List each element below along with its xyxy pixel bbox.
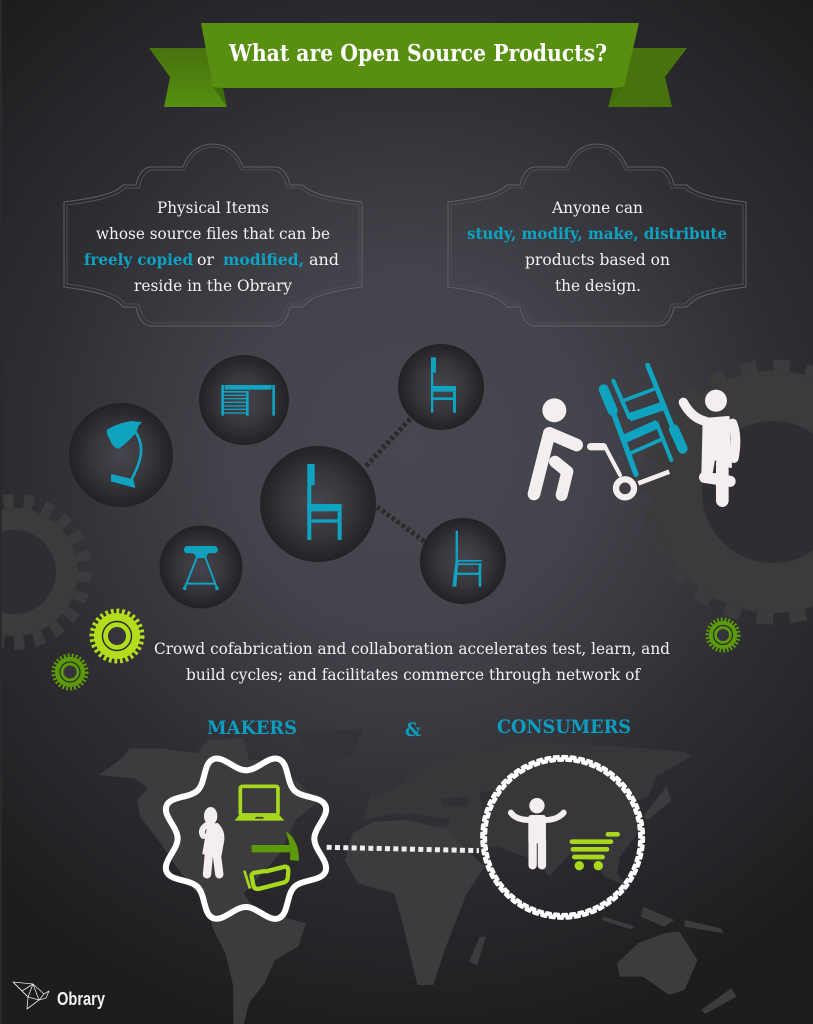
thinking person <box>202 807 223 874</box>
text: crowd cofabrication: build cycles; and facilitates commerce through network of <box>186 666 641 684</box>
text: anyone can <box>467 199 727 295</box>
text: anyone can: Anyone can <box>551 199 643 217</box>
text: physical items: freely copied <box>84 250 193 269</box>
consumer person <box>511 798 564 865</box>
dotted connector <box>327 847 479 851</box>
icon: origami bird <box>13 982 49 1009</box>
ribbon right tail <box>608 48 687 107</box>
consumers scalloped badge <box>482 756 644 918</box>
gear: green right <box>708 620 738 650</box>
node: bottom chair <box>420 518 506 604</box>
clamp <box>244 867 288 889</box>
person pushing <box>534 398 577 495</box>
shopping cart <box>572 834 618 870</box>
makers and consumers diagram <box>155 748 644 929</box>
node: central chair <box>260 446 376 562</box>
panel: physical items <box>64 144 362 326</box>
text: physical items: or <box>197 251 215 269</box>
text: crowd cofabrication <box>154 640 670 684</box>
laptop <box>235 786 284 821</box>
text: physical items: whose source files that can be <box>96 225 330 243</box>
node: lamp <box>69 403 173 507</box>
gear: green left <box>54 656 86 688</box>
title: What are Open Source Products? <box>228 40 607 67</box>
text: anyone can: products based on <box>525 251 670 269</box>
text: physical items: modified, <box>223 250 304 269</box>
dotted connector: bottom <box>377 507 442 554</box>
text: physical items: reside in the Obrary <box>134 277 292 295</box>
text: anyone can: the design. <box>555 277 641 295</box>
text: physical items <box>84 199 339 295</box>
tilted chairs <box>604 365 683 474</box>
world map <box>99 728 736 1024</box>
wordmark: Obrary <box>57 989 105 1009</box>
gear: large right <box>647 366 813 618</box>
heading: ampersand: & <box>405 720 421 741</box>
gear: lime large <box>92 611 142 661</box>
ornate frame <box>64 144 362 326</box>
heading: makers: MAKERS <box>207 718 297 739</box>
text: crowd cofabrication: Crowd cofabrication and collaboration accelerates test, learn, and <box>154 640 670 658</box>
dotted connector: top <box>366 418 411 466</box>
node: stool <box>160 526 242 608</box>
sea patches <box>405 792 493 827</box>
gear: large left <box>0 501 85 643</box>
node: top chair <box>398 344 484 430</box>
text: physical items: Physical Items <box>157 199 269 217</box>
hammer <box>252 832 299 861</box>
text: anyone can: study, modify, make, distribute <box>467 224 727 243</box>
title ribbon <box>149 23 687 107</box>
product network <box>69 344 506 608</box>
makers wavy badge <box>155 748 337 929</box>
heading: consumers: CONSUMERS <box>497 717 631 738</box>
ornate frame <box>448 144 746 326</box>
text: physical items: and <box>309 251 339 269</box>
person receiving <box>683 390 736 501</box>
logo: Obrary <box>13 982 105 1009</box>
ribbon centre <box>201 23 639 88</box>
panel: anyone can <box>448 144 746 326</box>
ribbon left tail <box>149 48 227 107</box>
hand truck <box>591 447 669 497</box>
illustration: moving a chair on a hand truck <box>534 365 736 501</box>
node: desk <box>199 355 289 445</box>
